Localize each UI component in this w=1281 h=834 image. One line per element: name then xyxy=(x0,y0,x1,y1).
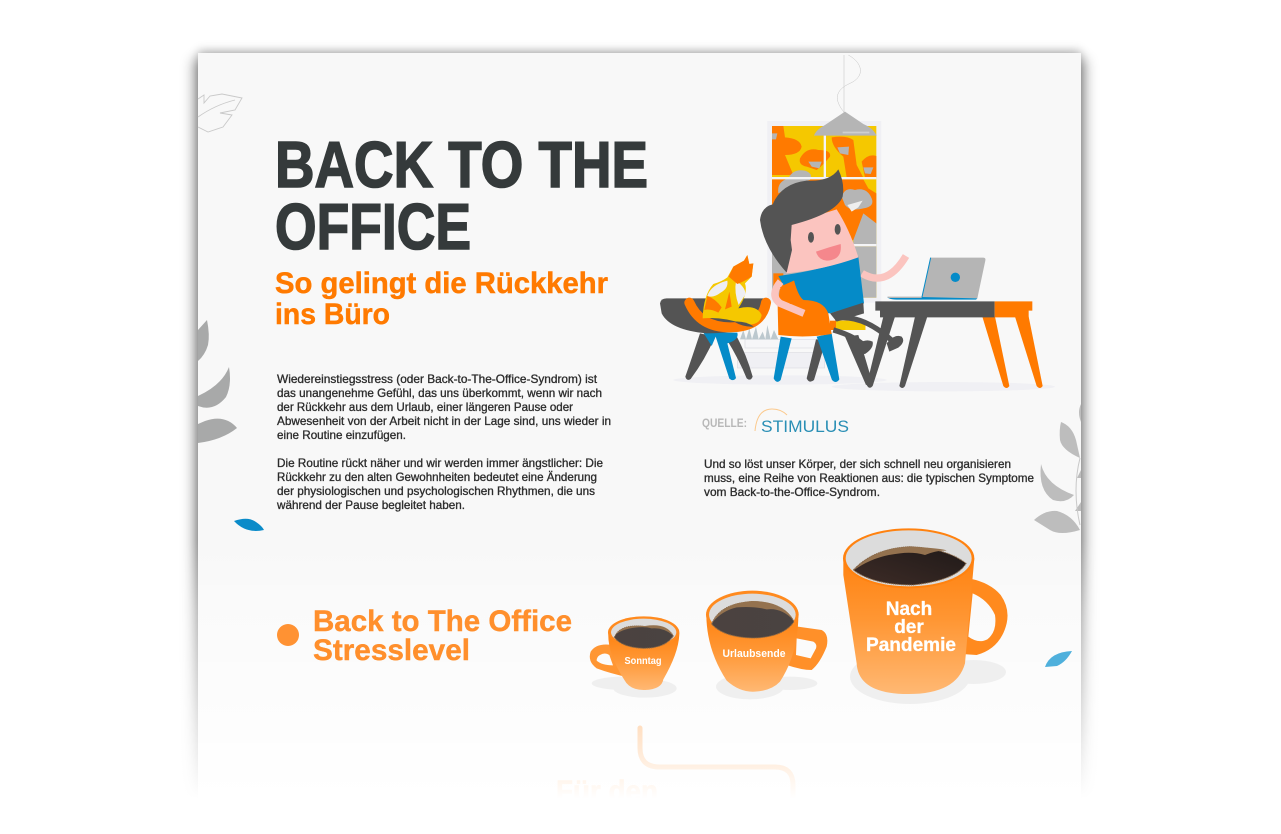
illustration: man with cat at desk xyxy=(660,55,1055,391)
title: OFFICE xyxy=(275,190,471,263)
raised arm xyxy=(862,256,906,278)
stress level heading: Stresslevel xyxy=(313,634,470,667)
text block: introduction: Abwesenheit von der Arbeit nicht in der Lage sind, uns wieder in xyxy=(277,414,611,428)
yellow block behind legs xyxy=(836,321,865,330)
mug label: Sonntag: Sonntag xyxy=(624,656,662,667)
medium mug xyxy=(706,591,827,692)
small mug xyxy=(590,616,679,690)
icon: light blue leaf right xyxy=(1045,651,1072,667)
man's chair legs xyxy=(774,333,873,385)
text block: introduction: Rückkehr zu den alten Gewohnheiten bedeutet eine Änderung xyxy=(277,470,597,484)
hanging lamp xyxy=(814,55,877,136)
stress level heading: Back to The Office xyxy=(313,605,572,638)
title xyxy=(275,128,648,263)
cat chair xyxy=(660,298,769,380)
text block: introduction: das unangenehme Gefühl, das uns überkommt, wenn wir nach xyxy=(277,386,602,400)
shirt xyxy=(778,257,864,313)
mug label: Urlaubsende: Urlaubsende xyxy=(722,648,786,660)
text block: introduction: während der Pause begleitet haben. xyxy=(276,498,465,512)
planter xyxy=(737,325,825,368)
cat xyxy=(703,255,762,327)
hair xyxy=(760,169,843,273)
text block: introduction xyxy=(276,372,611,512)
text block: introduction: Wiedereinstiegsstress (oder Back-to-The-Office-Syndrom) ist xyxy=(277,372,598,386)
text block: introduction: der physiologischen und psychologischen Rhythmen, die uns xyxy=(277,484,595,498)
connector line xyxy=(640,728,793,810)
mug label: Nach der Pandemie: Nach xyxy=(886,599,932,620)
floor shadows xyxy=(673,375,1055,391)
laptop xyxy=(887,258,985,300)
source logo: STIMULUS xyxy=(761,417,849,436)
title: BACK TO THE xyxy=(275,128,648,201)
man xyxy=(760,169,906,354)
icon: outlined leaf top left xyxy=(198,94,242,132)
subtitle: ins Büro xyxy=(275,298,390,331)
subtitle: So gelingt die Rückkehr xyxy=(275,267,608,300)
source logo: QUELLE: xyxy=(702,416,747,430)
large mug xyxy=(843,528,1008,694)
icon: grey leaves right xyxy=(1034,404,1081,533)
desk xyxy=(867,301,1043,388)
icon: blue leaf left xyxy=(234,519,264,531)
text block: symptoms xyxy=(704,457,1034,499)
source logo xyxy=(702,409,849,436)
text block: introduction: Die Routine rückt näher und wir werden immer ängstlicher: Die xyxy=(277,456,603,470)
faded next section heading: Für den xyxy=(556,775,658,808)
window xyxy=(767,121,881,330)
icon: grey leaves left xyxy=(198,320,237,443)
seat back xyxy=(778,281,832,336)
stress level heading xyxy=(277,605,572,667)
subtitle xyxy=(275,267,608,331)
card background xyxy=(198,53,1081,813)
mug label: Nach der Pandemie: Pandemie xyxy=(866,635,956,656)
mug label: Nach der Pandemie xyxy=(866,599,956,656)
text block: introduction: eine Routine einzufügen. xyxy=(277,428,406,442)
text block: introduction: der Rückkehr aus dem Urlaub, einer längeren Pause oder xyxy=(277,400,573,414)
mug label: Nach der Pandemie: der xyxy=(894,617,924,638)
text block: symptoms: Und so löst unser Körper, der sich schnell neu organisieren xyxy=(704,457,1011,471)
mug shadows xyxy=(592,649,1006,704)
legs xyxy=(830,303,864,322)
left arm xyxy=(775,282,804,313)
coffee mugs xyxy=(590,528,1008,704)
text block: symptoms: muss, eine Reihe von Reaktionen aus: die typischen Symptome xyxy=(704,471,1034,485)
text block: symptoms: vom Back-to-the-Office-Syndrom. xyxy=(704,485,880,499)
face xyxy=(786,209,858,273)
bottom fade overlay xyxy=(150,540,1130,834)
